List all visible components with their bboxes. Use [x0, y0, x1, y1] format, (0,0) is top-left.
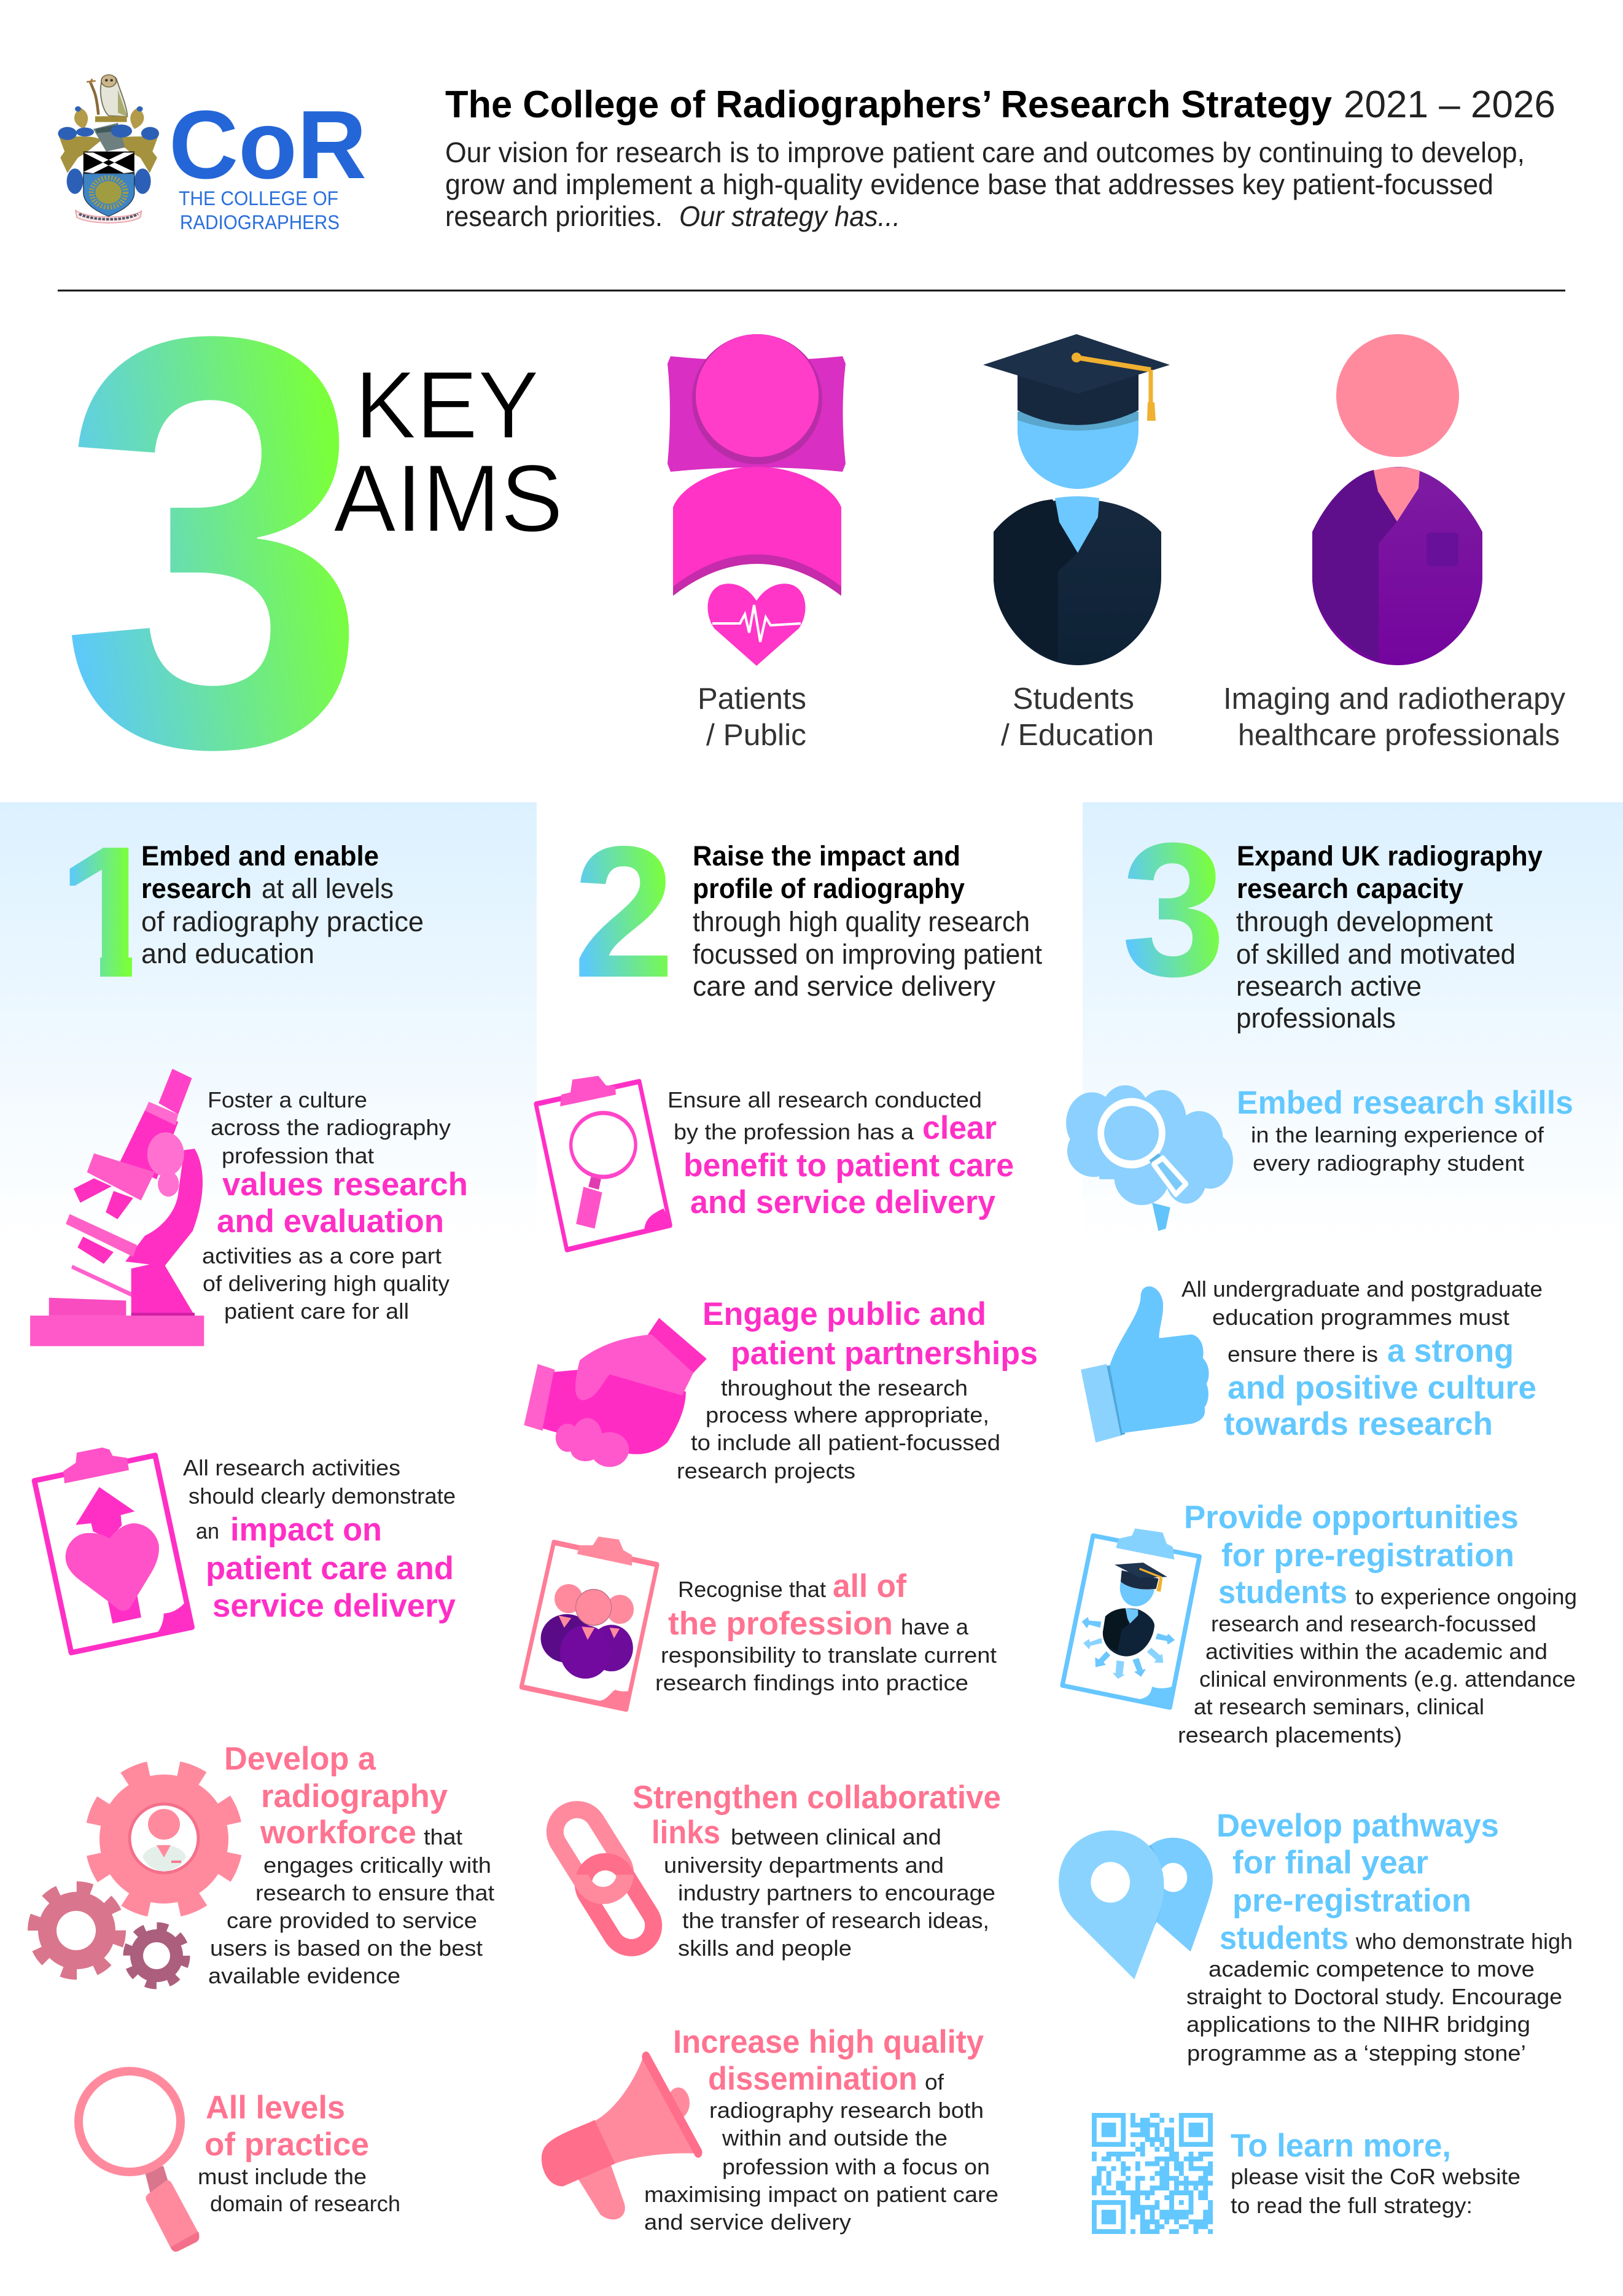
heading: raise the impact: care and service delivery [693, 970, 995, 1002]
heading: expand research capacity: of skilled and motivated [1236, 939, 1516, 970]
text: develop pathways: Develop pathways [1216, 1808, 1499, 1844]
icon: gears with professional [33, 1754, 249, 1985]
text: foster a culture [202, 1087, 468, 1324]
heading: key aims: KEY [355, 352, 539, 459]
heading: raise the impact [693, 840, 1042, 1002]
text: develop a radiography workforce: research to ensure that [255, 1880, 494, 1905]
text: increase dissemination [644, 2024, 998, 2235]
text: impact on patient care: service delivery [212, 1588, 456, 1624]
text: to learn more: To learn more, [1231, 2128, 1451, 2164]
text: pre-registration opportunities: to experience ongoing [1355, 1584, 1577, 1609]
heading: embed and enable research: and education [141, 938, 314, 969]
text: all of the profession: all of [833, 1568, 906, 1604]
text: impact on patient care: patient care and [206, 1550, 454, 1587]
text: develop a radiography workforce: engages critically with [263, 1853, 491, 1878]
text: embed research skills: in the learning experience of [1251, 1122, 1544, 1147]
icon: chain links [547, 1801, 662, 1956]
number 3: 3 [1121, 803, 1226, 1016]
text: develop pathways [1186, 1808, 1573, 2066]
text: impact on patient care: an [196, 1518, 219, 1544]
heading: expand research capacity: professionals [1236, 1002, 1396, 1034]
icon: clipboard with magnifier [536, 1076, 672, 1250]
text: strengthen collaborative links: the transfer of research ideas, [682, 1908, 989, 1933]
title: 2021 – 2026 [1344, 84, 1555, 126]
text: develop pathways: for final year [1232, 1845, 1428, 1881]
column: aim 3 [1059, 803, 1577, 2234]
text: strengthen collaborative links: Strengthen collaborative [632, 1779, 1001, 1816]
text: pre-registration opportunities: for pre-registration [1221, 1537, 1514, 1574]
text: strong positive culture [1181, 1276, 1543, 1442]
icon: handshake [524, 1318, 707, 1467]
text: all of the profession: the profession [668, 1606, 893, 1642]
label: students / education: / Education [1001, 719, 1154, 752]
text: engage public: research projects [677, 1458, 855, 1483]
text: impact on patient care: All research activities [183, 1455, 400, 1480]
text: pre-registration opportunities: clinical environments (e.g. attendance [1199, 1666, 1576, 1692]
heading: expand research capacity: research capacity [1237, 873, 1463, 904]
heading: expand research capacity: Expand UK radiography [1237, 840, 1543, 872]
text: foster a culture: across the radiography [211, 1115, 451, 1140]
heading: embed and enable research: of radiography practice [141, 906, 424, 937]
label: patients / public [698, 682, 806, 752]
text: strengthen collaborative links: university departments and [664, 1853, 944, 1878]
text: foster a culture: Foster a culture [208, 1087, 367, 1112]
text: strong positive culture: education programmes must [1212, 1305, 1509, 1330]
text: impact on patient care: impact on [230, 1512, 382, 1548]
text: engage public: patient partnerships [731, 1335, 1038, 1372]
text: increase dissemination: dissemination [708, 2061, 917, 2097]
text: strengthen collaborative links: industry partners to encourage [678, 1880, 995, 1905]
text: strong positive culture: towards research [1224, 1406, 1493, 1442]
label: imaging and radiotherapy healthcare professionals: Imaging and radiotherapy [1223, 682, 1565, 716]
text: embed research skills: every radiography student [1253, 1150, 1524, 1176]
text: clear benefit [667, 1087, 1014, 1220]
icon: clipboard with graduate and arrows [1062, 1528, 1199, 1709]
icon: clipboard with group of professionals [521, 1537, 657, 1711]
3 key aims section [59, 215, 1565, 869]
text: strengthen collaborative links [632, 1779, 1001, 1961]
panel: aim 1 background [0, 802, 537, 1241]
text: all of the profession: have a [901, 1614, 969, 1639]
text: develop a radiography workforce: available evidence [208, 1963, 400, 1988]
text: clear benefit: clear [922, 1110, 997, 1146]
text: engage public: process where appropriate, [706, 1402, 989, 1427]
text: increase dissemination: within and outside the [722, 2125, 948, 2150]
text: embed research skills [1237, 1085, 1573, 1176]
text: pre-registration opportunities [1178, 1499, 1577, 1747]
icon: clipboard with heart and arrow [34, 1448, 193, 1653]
text: engage public [677, 1296, 1038, 1483]
text: develop a radiography workforce: care provided to service [227, 1908, 477, 1933]
text: develop pathways: who demonstrate high [1355, 1929, 1573, 1954]
text: pre-registration opportunities: activities within the academic and [1205, 1639, 1547, 1664]
icon: coat of arms crest [51, 61, 159, 223]
heading: key aims [333, 352, 563, 552]
text: increase dissemination: maximising impact on patient care [644, 2182, 998, 2207]
icon: microscope [30, 1069, 204, 1346]
heading: expand research capacity [1236, 840, 1543, 1034]
text: develop pathways: pre-registration [1232, 1883, 1471, 1919]
text: strong positive culture: a strong [1387, 1333, 1514, 1369]
text: all levels of practice [198, 2090, 400, 2216]
text: all of the profession: responsibility to translate current [661, 1642, 997, 1668]
text: pre-registration opportunities: research placements) [1178, 1722, 1402, 1747]
text: develop pathways: straight to Doctoral study. Encourage [1186, 1984, 1562, 2009]
text: develop pathways: applications to the NIHR bridging [1186, 2012, 1530, 2037]
vision statement: research priorities. [445, 200, 663, 232]
text: impact on patient care: should clearly demonstrate [189, 1483, 456, 1509]
text: clear benefit: and service delivery [690, 1184, 996, 1220]
text: pre-registration opportunities: Provide opportunities [1184, 1499, 1519, 1536]
text: all levels of practice: domain of research [210, 2191, 400, 2216]
icon: healthcare professional [1312, 334, 1482, 665]
title: The College of Radiographers’ Research Strategy [445, 84, 1333, 126]
text: embed research skills: Embed research skills [1237, 1085, 1573, 1121]
heading: embed and enable research: research [141, 873, 252, 904]
text: develop a radiography workforce [208, 1741, 494, 1988]
text: all levels of practice: of practice [204, 2126, 369, 2163]
QR code [1092, 2113, 1213, 2234]
text: engage public: to include all patient-focussed [691, 1430, 1000, 1455]
text: clear benefit: Ensure all research conducted [667, 1087, 982, 1112]
text: foster a culture: activities as a core part [202, 1243, 442, 1268]
heading: expand research capacity: through development [1236, 906, 1493, 937]
text: engage public: throughout the research [721, 1375, 968, 1400]
logo wordmark: RADIOGRAPHERS [180, 211, 340, 233]
vision statement [445, 136, 1525, 232]
logo wordmark: THE COLLEGE OF [179, 187, 338, 209]
label: students / education [1001, 682, 1154, 752]
text: to learn more: to read the full strategy: [1231, 2193, 1473, 2218]
text: pre-registration opportunities: students [1218, 1574, 1347, 1611]
heading: expand research capacity: research active [1236, 970, 1422, 1002]
text: all of the profession: Recognise that [678, 1577, 826, 1602]
icon: graduate student [983, 334, 1170, 665]
text: develop pathways: students [1220, 1920, 1349, 1956]
text: develop a radiography workforce: workforce [260, 1814, 416, 1851]
text: increase dissemination: and service delivery [644, 2209, 851, 2235]
text: pre-registration opportunities: research and research-focussed [1211, 1611, 1536, 1636]
icon: magnifying glass [79, 2071, 199, 2252]
icon: patient in bed with heart [667, 334, 846, 666]
text: all of the profession [655, 1568, 997, 1695]
text: develop a radiography workforce: radiography [261, 1778, 448, 1814]
big number 3: 3 [59, 215, 369, 869]
vision statement: grow and implement a high-quality evidence base that addresses key patient-focussed [445, 168, 1493, 200]
text: to learn more: please visit the CoR website [1231, 2164, 1520, 2189]
column: aim 2 [521, 807, 1042, 2235]
heading: raise the impact: profile of radiography [693, 873, 965, 904]
heading: key aims: AIMS [333, 445, 563, 552]
number 2: 2 [573, 807, 675, 1017]
heading: embed and enable research: Embed and enable [141, 840, 379, 872]
label: patients / public: / Public [706, 719, 806, 752]
label: patients / public: Patients [698, 682, 806, 716]
text: increase dissemination: radiography research both [709, 2098, 984, 2123]
text: strengthen collaborative links: links [652, 1814, 720, 1851]
heading: raise the impact: Raise the impact and [693, 840, 960, 872]
label: students / education: Students [1013, 682, 1134, 716]
text: develop pathways: programme as a ‘stepping stone’ [1187, 2040, 1526, 2066]
text: strengthen collaborative links: skills and people [678, 1935, 852, 1961]
text: clear benefit: by the profession has a [674, 1119, 914, 1144]
header [51, 61, 1555, 233]
heading: raise the impact: focussed on improving patient [693, 939, 1042, 970]
label: imaging and radiotherapy healthcare professionals [1223, 682, 1565, 752]
icon: brain cloud with magnifier [1066, 1085, 1233, 1231]
text: develop a radiography workforce: users is based on the best [210, 1935, 483, 1961]
text: impact on patient care [183, 1455, 456, 1624]
text: strong positive culture: All undergraduate and postgraduate [1181, 1276, 1543, 1302]
text: foster a culture: profession that [222, 1143, 374, 1168]
heading: embed and enable research [141, 840, 424, 969]
panel: aim 3 background [1083, 802, 1623, 1241]
text: foster a culture: patient care for all [224, 1298, 409, 1324]
vision statement: Our strategy has... [679, 200, 900, 232]
icon: thumbs up [1081, 1286, 1209, 1442]
column: aim 1 [30, 807, 494, 2252]
number 1: 1 [56, 807, 165, 1017]
text: strong positive culture: ensure there is [1228, 1341, 1378, 1367]
text: foster a culture: of delivering high quality [203, 1271, 450, 1296]
text: increase dissemination: profession with a focus on [722, 2154, 990, 2179]
label: imaging and radiotherapy healthcare professionals: healthcare professionals [1238, 719, 1560, 752]
text: clear benefit: benefit to patient care [683, 1147, 1014, 1184]
text: increase dissemination: Increase high quality [673, 2024, 984, 2060]
text: strengthen collaborative links: between clinical and [731, 1824, 941, 1849]
text: all levels of practice: must include the [198, 2164, 367, 2189]
icon: map pins [1059, 1830, 1213, 1979]
text: develop a radiography workforce: Develop a [224, 1741, 376, 1777]
text: develop a radiography workforce: that [424, 1824, 462, 1849]
icon: megaphone [542, 2057, 701, 2219]
text: increase dissemination: of [925, 2069, 944, 2095]
text: foster a culture: values research [222, 1166, 468, 1203]
text: develop pathways: academic competence to move [1208, 1956, 1535, 1982]
logo wordmark: CoR [169, 91, 367, 199]
text: foster a culture: and evaluation [217, 1203, 444, 1240]
text: to learn more [1231, 2128, 1520, 2218]
text: strong positive culture: and positive culture [1228, 1370, 1536, 1406]
text: engage public: Engage public and [703, 1296, 986, 1332]
logo: College of Radiographers [51, 61, 367, 233]
heading: embed and enable research: at all levels [262, 873, 394, 904]
heading: raise the impact: through high quality research [693, 906, 1030, 937]
text: all of the profession: research findings into practice [655, 1670, 968, 1695]
text: pre-registration opportunities: at research seminars, clinical [1194, 1694, 1484, 1719]
vision statement: Our vision for research is to improve patient care and outcomes by continuing to develop, [445, 136, 1525, 168]
text: all levels of practice: All levels [206, 2090, 345, 2126]
